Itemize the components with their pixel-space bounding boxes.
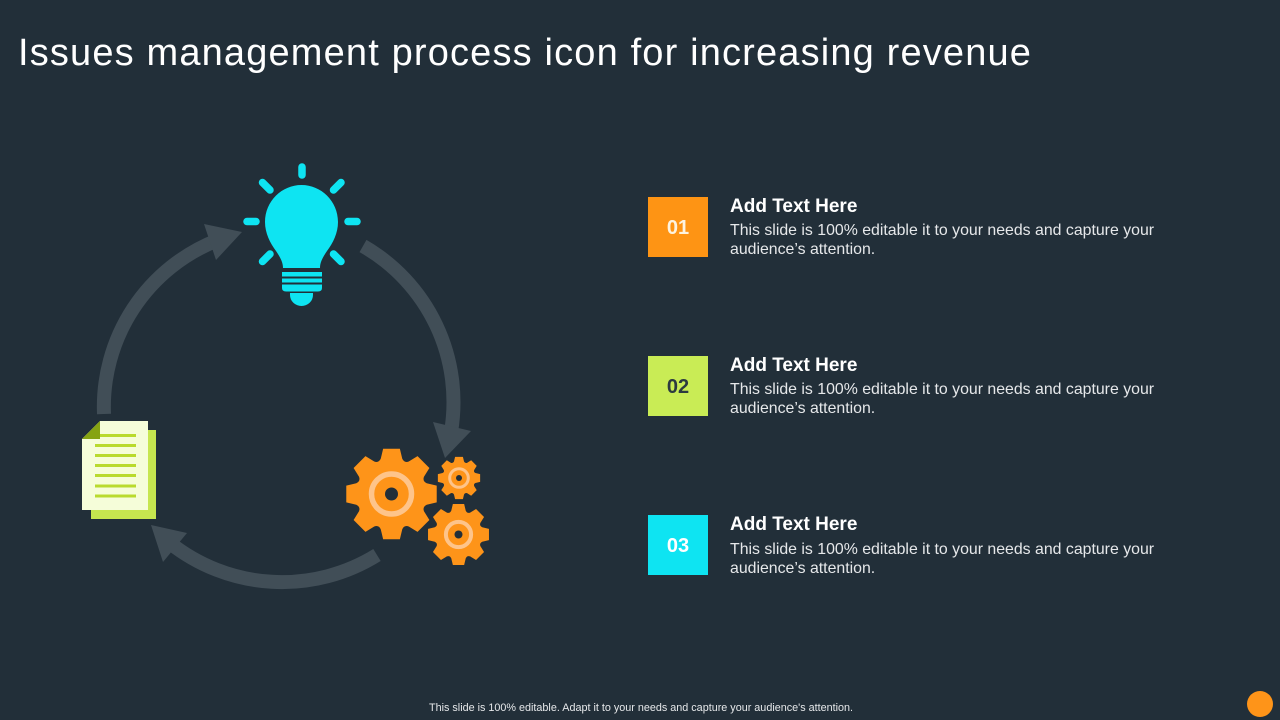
- number badge 03: 03: [667, 535, 689, 557]
- icon: light bulb: [247, 167, 357, 306]
- item 03: [648, 514, 1154, 577]
- large gear: [346, 449, 437, 539]
- orange corner dot: [1247, 691, 1273, 717]
- body text 01: audience’s attention.: [730, 241, 875, 258]
- heading 01: Add Text Here: [730, 196, 857, 217]
- icon: document: [82, 421, 156, 519]
- title: Issues management process icon for increasing revenue: [18, 32, 1032, 74]
- body text 01: This slide is 100% editable it to your needs and capture your: [730, 222, 1154, 239]
- arrow: document to bulb: [104, 224, 242, 414]
- item 01: [648, 196, 1154, 258]
- body text 02: This slide is 100% editable it to your needs and capture your: [730, 381, 1154, 398]
- body text 03: This slide is 100% editable it to your needs and capture your: [730, 541, 1154, 558]
- body text 01: [730, 222, 1154, 258]
- number badge 02: [648, 356, 708, 416]
- arrow: gears to document: [151, 525, 377, 582]
- number badge 01: 01: [667, 217, 689, 239]
- medium gear: [428, 504, 489, 565]
- small gear: [438, 457, 480, 499]
- number badge 02: 02: [667, 376, 689, 398]
- item 02: [648, 355, 1154, 417]
- heading 02: Add Text Here: [730, 355, 857, 376]
- number badge 03: [648, 515, 708, 575]
- body text 02: audience’s attention.: [730, 400, 875, 417]
- footer note: This slide is 100% editable. Adapt it to your needs and capture your audience's attention.: [429, 702, 853, 714]
- heading 03: Add Text Here: [730, 514, 857, 535]
- body text 03: [730, 541, 1154, 577]
- icon: gears: [346, 449, 489, 565]
- number badge 01: [648, 197, 708, 257]
- body text 02: [730, 381, 1154, 417]
- arrow: bulb to gears: [363, 246, 471, 458]
- body text 03: audience’s attention.: [730, 560, 875, 577]
